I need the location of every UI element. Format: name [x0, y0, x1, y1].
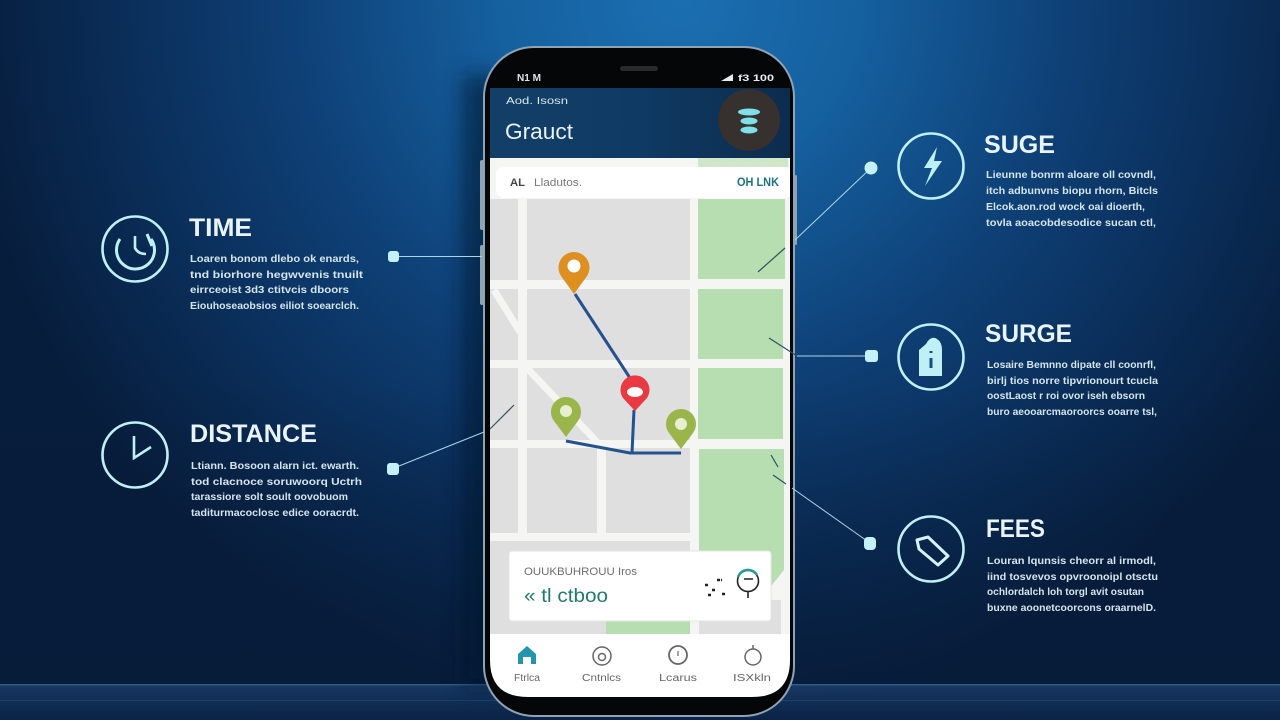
menu button icon — [718, 89, 780, 151]
status bar — [517, 66, 774, 84]
icon: tag with info — [898, 324, 964, 390]
app header: Grauct — [505, 119, 573, 144]
panel: fees — [898, 515, 1158, 614]
description: surge: oostLaost r roi ovor iseh ebsorn — [987, 390, 1145, 402]
panel: suge — [898, 131, 1158, 229]
card icon — [705, 570, 758, 598]
connector: suge — [758, 162, 878, 272]
icon: circular timer — [102, 216, 168, 282]
icon: lightning bolt — [898, 134, 964, 198]
result card: « tl ctboo — [524, 586, 608, 607]
app header — [490, 88, 790, 158]
connector: fees — [771, 455, 876, 550]
description: time: eirrceoist 3d3 ctitvcis dboors — [190, 284, 349, 296]
search bar: Lladutos. — [534, 177, 582, 189]
description: surge: buro aeooarcmaoroorcs ooarre tsl, — [987, 406, 1157, 418]
description: fees: ochlordalch loh torgl avit osutan — [987, 586, 1144, 598]
description: time: tnd biorhore hegwvenis tnuilt — [190, 269, 364, 281]
search bar: AL — [510, 177, 525, 189]
route lines — [566, 294, 681, 453]
nav icon: profile — [745, 645, 761, 665]
pin: green left — [551, 397, 581, 437]
connector: time — [388, 251, 482, 262]
description: distance: Ltiann. Bosoon alarn ict. ewarth. — [191, 460, 359, 472]
description: distance: tod clacnoce soruwoorq Uctrh — [191, 476, 362, 488]
description: suge: tovla aoacobdesodice sucan ctl, — [986, 217, 1156, 229]
description: fees: buxne aoonetcoorcons oraarnelD. — [987, 602, 1156, 614]
screen — [490, 88, 792, 697]
search bar: OH LNK — [737, 175, 779, 189]
nav icon: group — [593, 647, 611, 665]
connector: surge — [769, 338, 878, 362]
bottom navigation: ISXkln — [733, 673, 771, 684]
description: fees: Louran lqunsis cheorr al irmodl, — [987, 555, 1156, 567]
phone body — [484, 47, 794, 716]
bottom navigation: Ftrlca — [514, 673, 540, 684]
diagonal roads — [494, 290, 597, 442]
connector: distance — [387, 405, 514, 475]
bottom navigation: Cntnlcs — [582, 673, 621, 684]
heading: distance: DISTANCE — [190, 420, 317, 448]
status bar: f3 100 — [738, 73, 774, 84]
result card — [509, 551, 771, 621]
bottom navigation — [490, 634, 790, 697]
description: distance: taditurmacoclosc edice ooracrdt. — [191, 507, 359, 519]
icon: clock — [102, 422, 168, 488]
description: surge: Losaire Bemnno dipate cll coonrfl, — [987, 359, 1156, 371]
pin: orange — [558, 252, 590, 294]
description: surge — [987, 359, 1158, 418]
heading: suge: SUGE — [984, 131, 1055, 159]
description: suge: itch adbunvns biopu rhorn, Bitcls — [986, 185, 1158, 197]
description: fees — [987, 555, 1158, 614]
description: distance — [191, 460, 362, 519]
result card: OUUKBUHROUU Iros — [524, 566, 638, 578]
heading: surge: SURGE — [985, 320, 1072, 348]
description: suge — [986, 169, 1158, 229]
map — [490, 158, 790, 634]
description: time: Loaren bonom dlebo ok enards, — [190, 253, 359, 265]
side buttons — [480, 160, 484, 230]
phone — [480, 47, 797, 716]
status bar: N1 M — [517, 73, 541, 84]
app header: Aod. Isosn — [506, 95, 568, 107]
phone shadow — [462, 75, 502, 685]
description: suge: Elcok.aon.rod wock oai dioerth, — [986, 201, 1145, 213]
description: surge: birlj tios norre tipvrionourt tcucla — [987, 375, 1158, 387]
panel: surge — [898, 320, 1158, 418]
panel: time — [102, 214, 364, 312]
description: distance: tarassiore solt soult oovobuom — [191, 491, 348, 503]
description: suge: Lieunne bonrm aloare oll covndl, — [986, 169, 1156, 181]
nav icon: clock — [669, 646, 687, 664]
description: time: Eiouhoseaobsios eiliot soearclch. — [190, 300, 359, 312]
icon: price tag — [898, 516, 964, 582]
panel: distance — [102, 420, 362, 519]
heading: time: TIME — [189, 214, 252, 242]
heading: fees: FEES — [986, 515, 1045, 543]
search bar — [496, 167, 792, 198]
description: time — [190, 253, 364, 312]
pin: green right — [666, 409, 696, 449]
bottom navigation: Lcarus — [659, 673, 697, 684]
description: fees: iind tosvevos opvroonoipl otsctu — [987, 571, 1158, 583]
nav icon: home — [518, 646, 536, 664]
pin: red — [620, 375, 650, 411]
